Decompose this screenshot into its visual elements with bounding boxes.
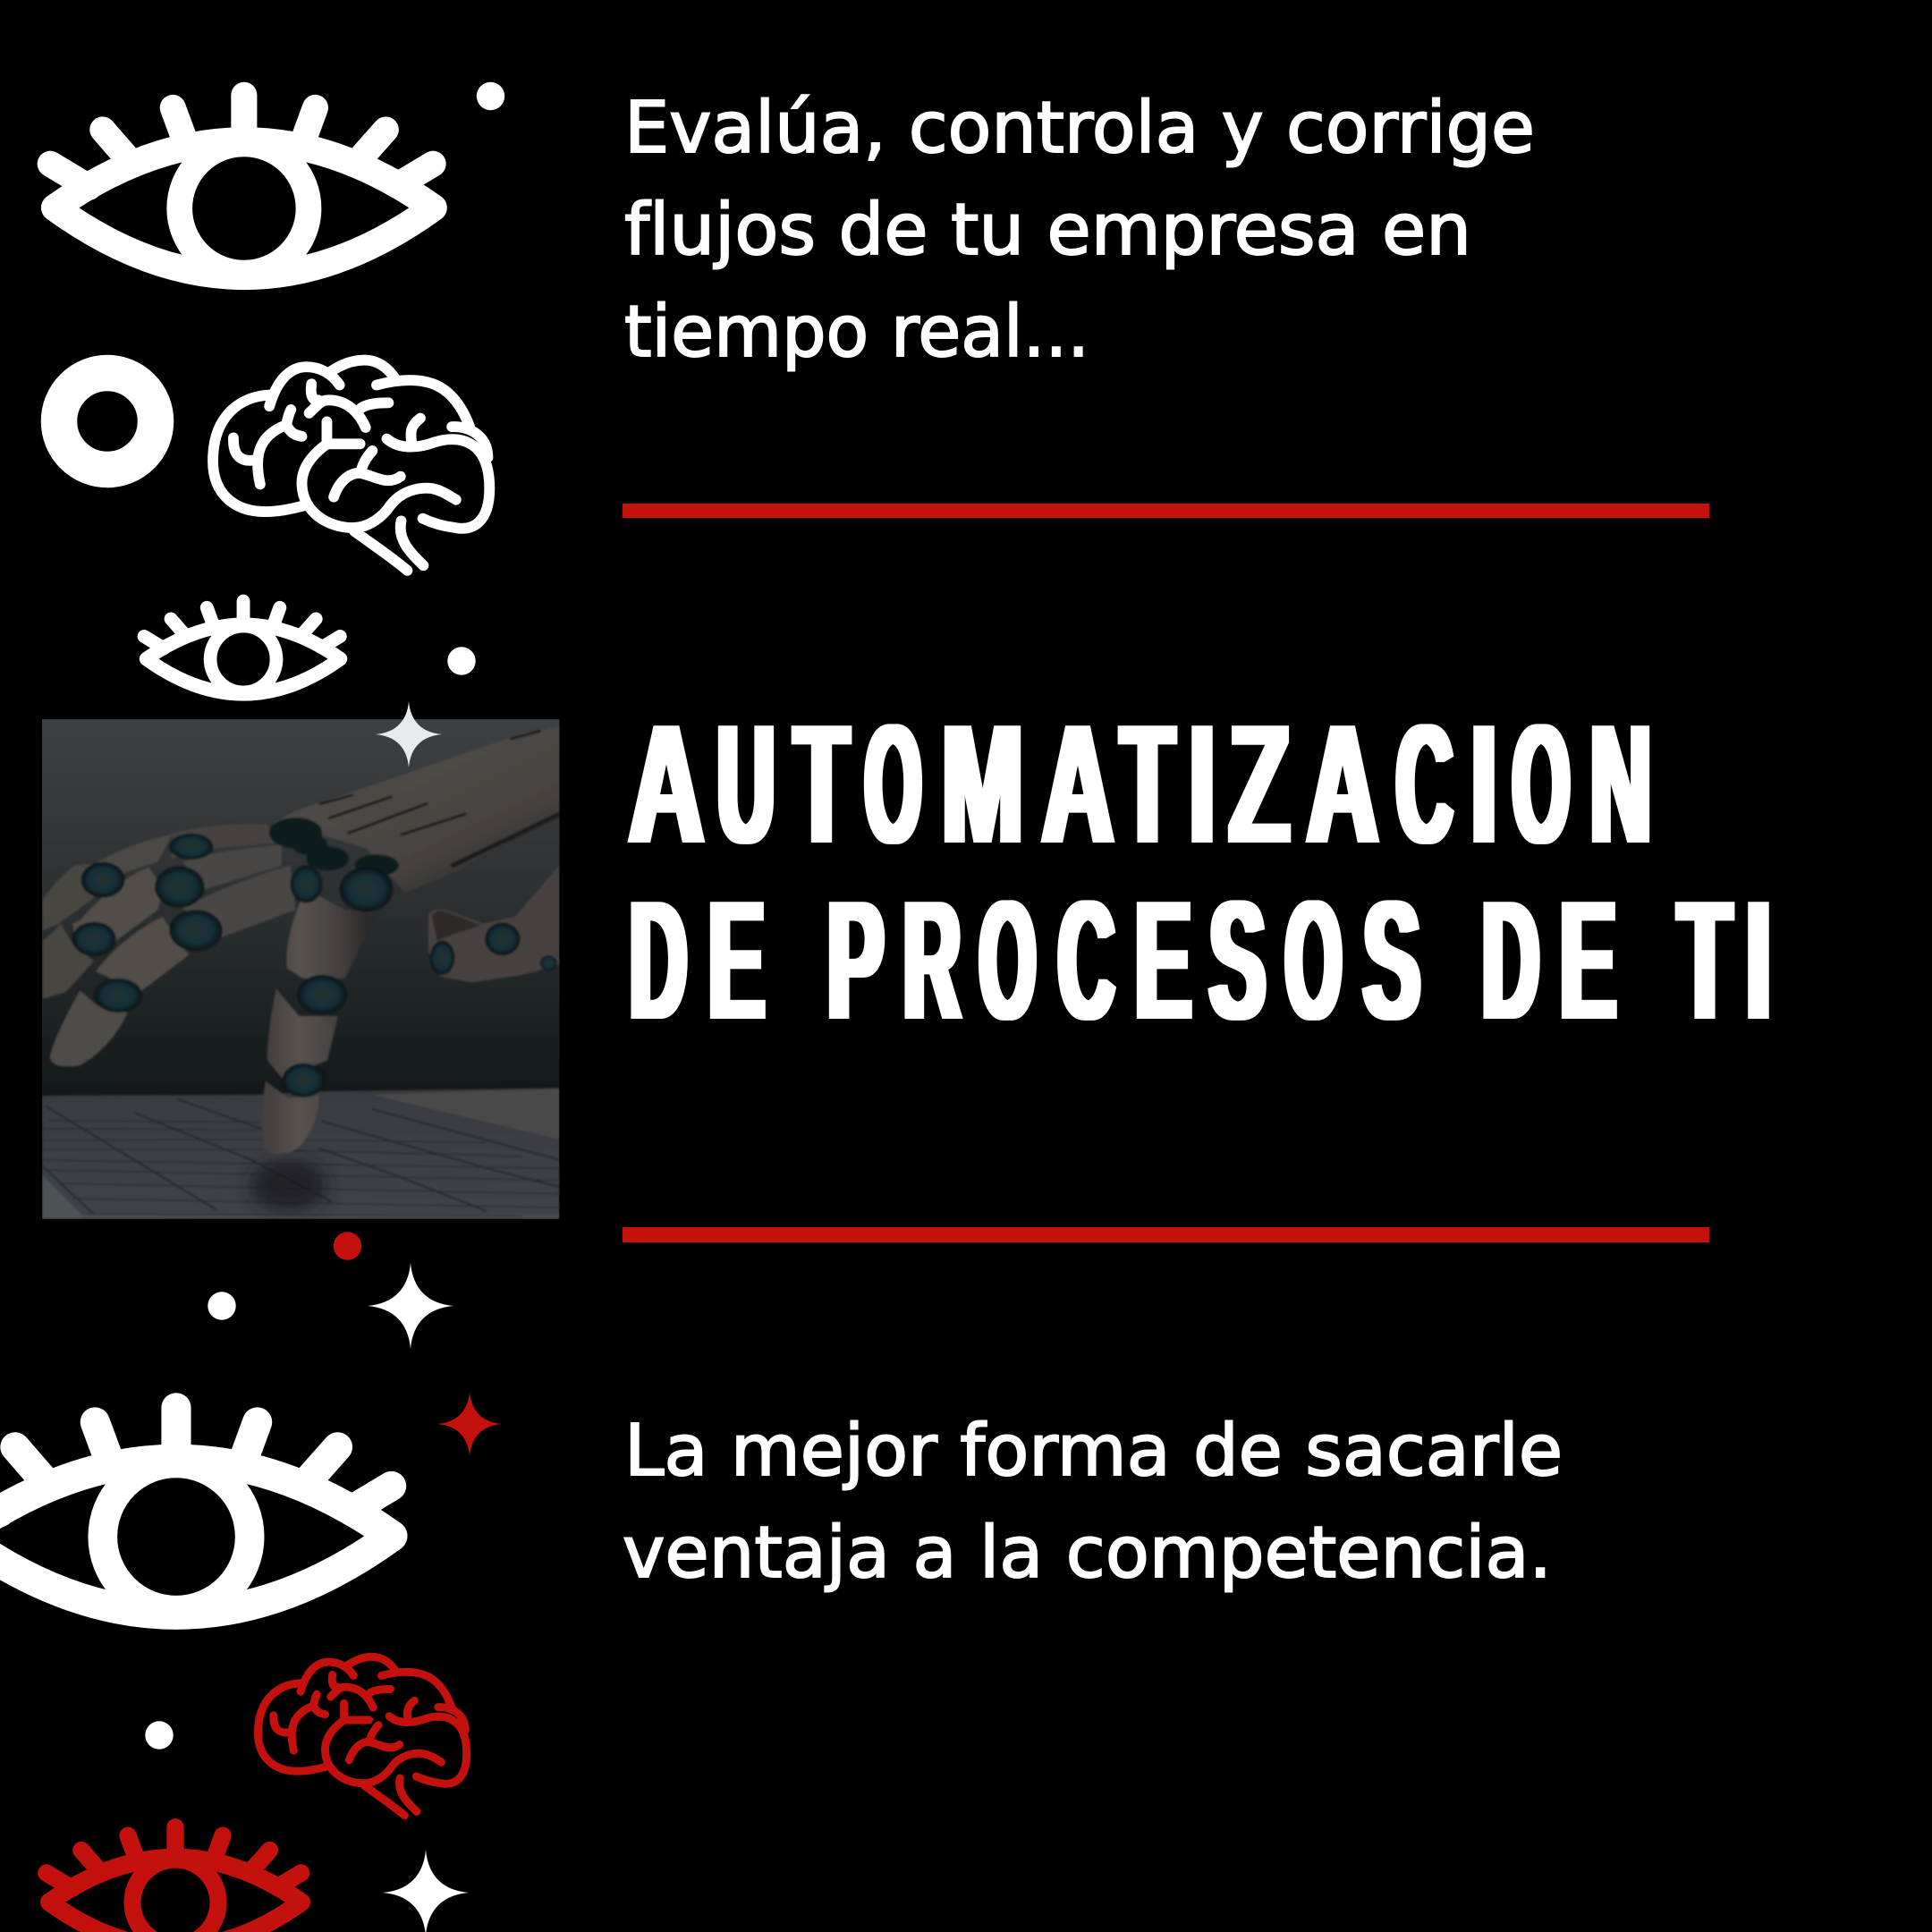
title: D (1482, 866, 1539, 1055)
text block: intro: tiempo real... (624, 291, 1089, 373)
text block: closing (623, 1410, 1563, 1594)
title: N (1590, 690, 1651, 879)
sparkle over photo (376, 701, 442, 767)
icon: white ring (59, 373, 156, 470)
icon: large white eye (50, 95, 433, 276)
title: O (979, 866, 1036, 1055)
title: O (1285, 866, 1342, 1055)
title: I (1746, 866, 1771, 1055)
title: D (630, 866, 687, 1055)
photo: robot hand typing on a keyboard (42, 719, 559, 1219)
title: S (1363, 866, 1420, 1055)
title: T (794, 690, 849, 879)
decorative white dot, bottom (145, 1721, 174, 1750)
white sparkle, bottom (383, 1850, 469, 1932)
icon: red eye, cropped at bottom (47, 1827, 301, 1932)
red sparkle (437, 1392, 502, 1456)
title: O (1513, 690, 1570, 879)
title: R (903, 866, 961, 1055)
title: Z (1229, 690, 1290, 879)
title: I (1471, 690, 1496, 879)
robot fingers, left group (43, 824, 296, 1066)
icon: large white eye, cropped at left (0, 1408, 392, 1614)
title: E (1135, 866, 1191, 1055)
title: O (865, 690, 921, 879)
decorative white dot, lower (208, 1292, 236, 1320)
text block: closing: ventaja a la competencia. (623, 1512, 1552, 1594)
title: U (717, 690, 775, 879)
icon: red brain (258, 1657, 467, 1816)
text block: closing: La mejor forma de sacarle (624, 1410, 1563, 1492)
title: C (1396, 690, 1453, 879)
white sparkle, lower (368, 1263, 453, 1349)
title: E (708, 866, 765, 1055)
title: A (629, 690, 704, 879)
title: A (1042, 690, 1114, 879)
decorative white dot, top (477, 82, 504, 110)
red divider, upper (623, 504, 1709, 518)
title (629, 690, 1771, 1055)
title: C (1058, 866, 1114, 1055)
title: T (1121, 690, 1174, 879)
text block: intro: flujos de tu empresa en (624, 189, 1471, 271)
title: P (827, 866, 884, 1055)
text block: intro: Evalúa, controla y corrige (624, 87, 1535, 169)
red divider, lower (623, 1227, 1709, 1242)
title: A (1307, 690, 1378, 879)
decorative white dot, middle (447, 647, 476, 675)
text block: intro (624, 87, 1535, 373)
decorative red dot (334, 1232, 361, 1260)
title: T (1678, 866, 1732, 1055)
title: I (1190, 690, 1215, 879)
title: M (942, 690, 1023, 879)
icon: white brain (213, 360, 489, 571)
icon: small white eye (144, 601, 340, 694)
title: E (1560, 866, 1616, 1055)
title: S (1209, 866, 1266, 1055)
